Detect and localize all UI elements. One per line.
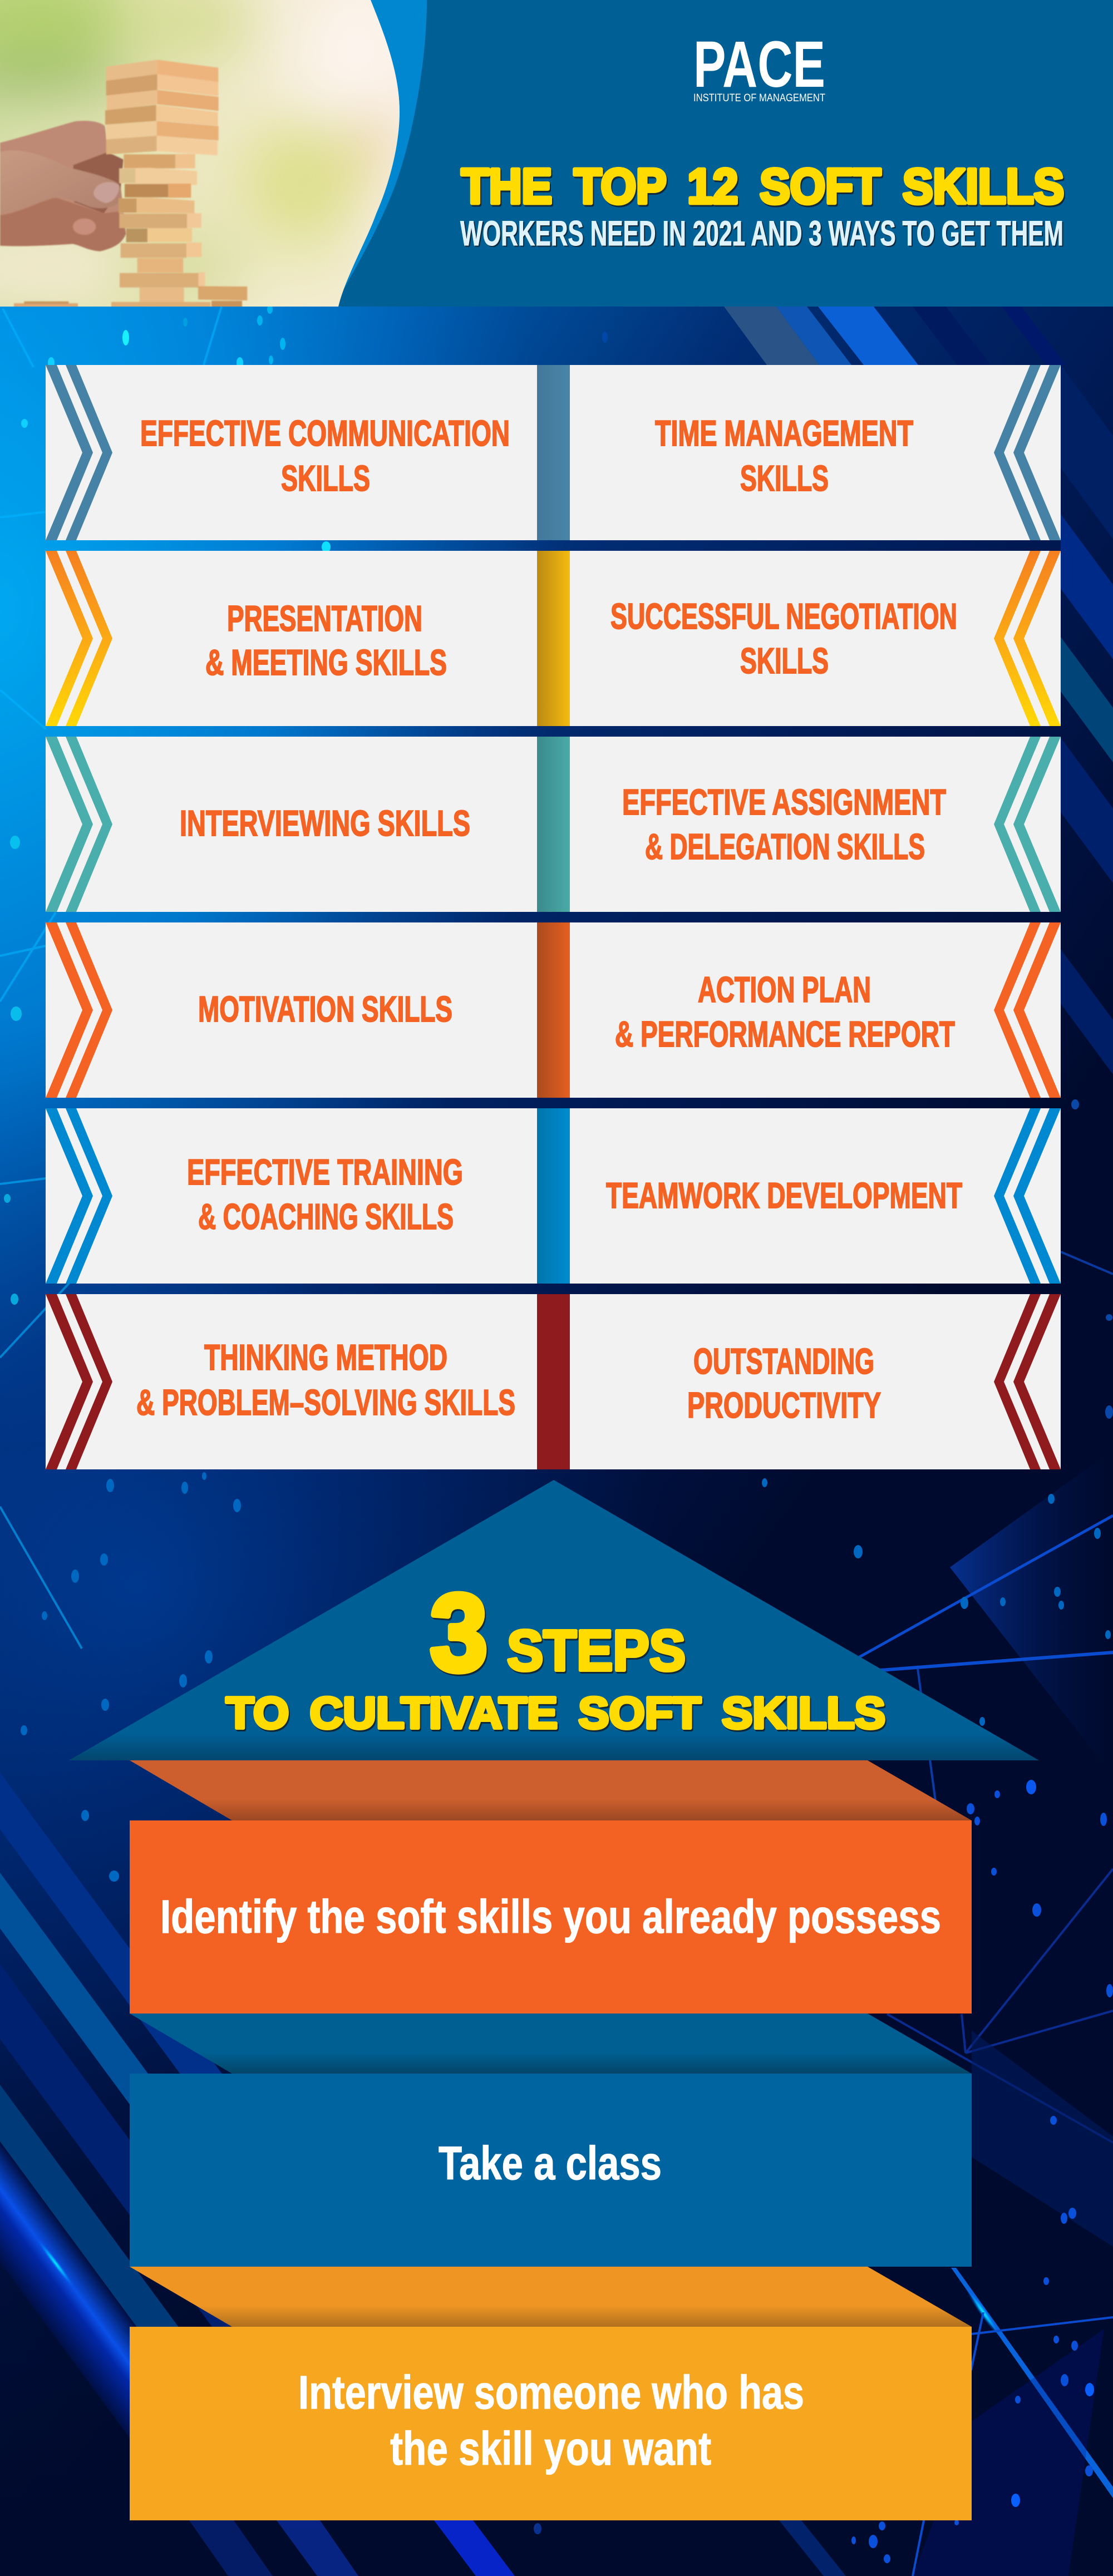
card: left and right bbox=[46, 365, 1061, 540]
tower bbox=[14, 60, 247, 308]
chevrons left bbox=[46, 922, 112, 1098]
top streaks bbox=[724, 307, 819, 365]
row 5 bbox=[46, 1108, 1061, 1284]
chevrons right bbox=[994, 922, 1061, 1098]
skill: outstanding productivity: PRODUCTIVITY bbox=[687, 1385, 881, 1425]
photo: hand stacking wooden blocks bbox=[0, 0, 406, 312]
row 3 bbox=[46, 737, 1061, 912]
heading: steps: STEPS bbox=[507, 1618, 686, 1682]
row 1 bbox=[46, 365, 1061, 540]
step 1 box bbox=[130, 1820, 972, 2014]
center bar bbox=[537, 737, 570, 912]
step 3 slanted top bbox=[130, 2267, 972, 2327]
step 2 box bbox=[130, 2074, 972, 2267]
skill: assignment and delegation: EFFECTIVE ASSIGNMENT bbox=[622, 782, 946, 822]
step 1 text: Identify the soft skills you already possess bbox=[160, 1891, 941, 1943]
big number 3: 3 bbox=[430, 1572, 487, 1694]
skill: successful negotiation: SUCCESSFUL NEGOTIATION bbox=[610, 596, 957, 636]
heading: to cultivate soft skills: TO CULTIVATE SOFT SKILLS bbox=[226, 1688, 885, 1738]
swoosh bbox=[312, 0, 427, 307]
row 2 bbox=[46, 551, 1061, 726]
logo: PACE bbox=[693, 28, 825, 101]
step 3 text: Interview someone who has bbox=[298, 2366, 804, 2419]
row 4 bbox=[46, 922, 1061, 1098]
center bar bbox=[537, 922, 570, 1098]
step 3 text: the skill you want bbox=[390, 2422, 711, 2475]
center bar bbox=[537, 1294, 570, 1469]
bottom streaks bbox=[277, 2520, 358, 2576]
title: THE TOP 12 SOFT SKILLS bbox=[461, 159, 1064, 214]
right gutter bands bbox=[1061, 365, 1113, 539]
card bbox=[46, 922, 1061, 1098]
upper-left thin lines bbox=[0, 307, 221, 1649]
skill: outstanding productivity: OUTSTANDING bbox=[693, 1341, 874, 1381]
skill: action plan and performance report: & PERFORMANCE REPORT bbox=[615, 1014, 955, 1054]
step 2 text: Take a class bbox=[439, 2137, 662, 2189]
chevrons left bbox=[46, 1108, 112, 1284]
lower-left bands bbox=[0, 1773, 234, 2146]
step 2 bbox=[130, 2014, 972, 2267]
skill: training and coaching: EFFECTIVE TRAINING bbox=[187, 1152, 463, 1192]
chevrons right bbox=[994, 737, 1061, 912]
skill: thinking and problem solving: & PROBLEM–SOLVING SKILLS bbox=[136, 1382, 515, 1423]
center bar bbox=[537, 365, 570, 540]
skill: presentation and meeting: & MEETING SKILLS bbox=[205, 642, 447, 683]
chevrons left bbox=[46, 365, 112, 540]
skill: successful negotiation: SKILLS bbox=[740, 640, 829, 681]
skill: presentation and meeting: PRESENTATION bbox=[227, 598, 422, 639]
skill: interviewing: INTERVIEWING SKILLS bbox=[180, 803, 470, 843]
header band bbox=[0, 0, 1113, 312]
chevrons right bbox=[994, 365, 1061, 540]
chevrons right bbox=[994, 1108, 1061, 1284]
center bar bbox=[537, 551, 570, 726]
card bbox=[46, 551, 1061, 726]
step 1 slanted top bbox=[130, 1760, 972, 1820]
lower-right streak bbox=[951, 2268, 1113, 2498]
chevrons left bbox=[46, 551, 112, 726]
center bar bbox=[537, 1108, 570, 1284]
skill: time management: TIME MANAGEMENT bbox=[655, 413, 913, 453]
skill: time management: SKILLS bbox=[740, 458, 829, 499]
step 3 box bbox=[130, 2327, 972, 2520]
chevrons left bbox=[46, 1294, 112, 1469]
chevrons right bbox=[994, 1294, 1061, 1469]
skill: teamwork development: TEAMWORK DEVELOPMENT bbox=[606, 1175, 962, 1216]
right upper crystal bbox=[950, 1450, 1113, 1776]
roof triangle with heading bbox=[69, 1480, 1039, 1760]
skill: assignment and delegation: & DELEGATION SKILLS bbox=[645, 826, 925, 867]
card bbox=[46, 737, 1061, 912]
card bbox=[46, 1108, 1061, 1284]
skill: motivation: MOTIVATION SKILLS bbox=[198, 989, 452, 1029]
step 1 bbox=[130, 1760, 972, 2014]
skill: training and coaching: & COACHING SKILLS bbox=[198, 1196, 454, 1237]
chevrons right bbox=[994, 551, 1061, 726]
hand bbox=[0, 121, 126, 251]
logo: INSTITUTE OF MANAGEMENT bbox=[693, 92, 825, 104]
step 2 slanted top bbox=[130, 2014, 972, 2074]
skill: thinking and problem solving: THINKING METHOD bbox=[204, 1337, 447, 1378]
skill: effective communication: SKILLS bbox=[281, 458, 370, 499]
row 6 bbox=[46, 1294, 1061, 1469]
skill: action plan and performance report: ACTION PLAN bbox=[698, 969, 871, 1010]
card bbox=[46, 1294, 1061, 1469]
step 3 bbox=[130, 2267, 972, 2520]
chevrons left bbox=[46, 737, 112, 912]
skill: effective communication: EFFECTIVE COMMUNICATION bbox=[140, 413, 510, 453]
